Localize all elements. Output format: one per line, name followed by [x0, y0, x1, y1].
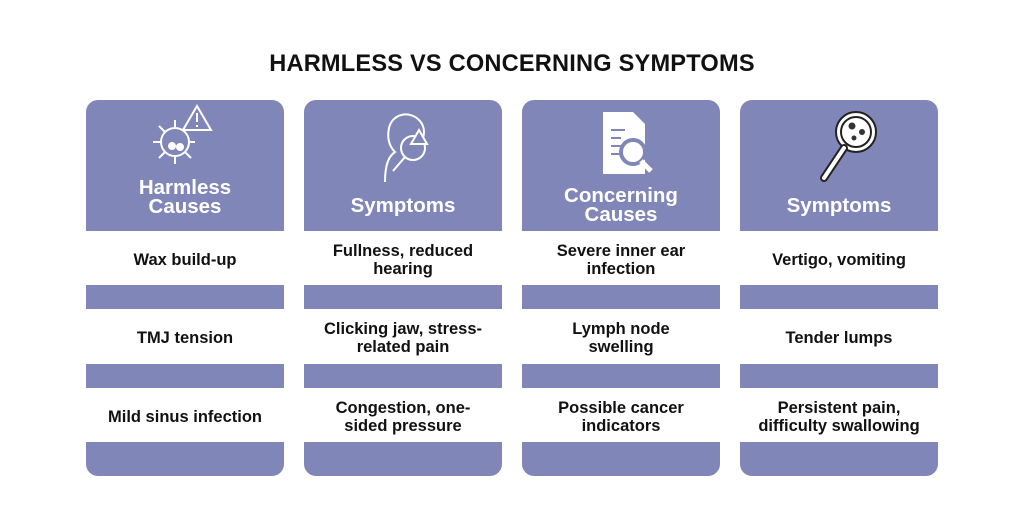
header: concerning causes [564, 112, 678, 226]
row: Congestion, one- [336, 398, 470, 416]
row: Wax build-up [134, 250, 236, 268]
header: symptoms [787, 111, 891, 217]
header: symptoms: Symptoms [787, 194, 891, 217]
panel: concerning causes [522, 100, 720, 476]
row: hearing [373, 260, 433, 278]
row: Mild sinus infection [108, 408, 262, 426]
row: Possible cancer [558, 398, 684, 416]
row [86, 231, 284, 285]
row [522, 231, 720, 285]
row: Tender lumps [786, 329, 892, 347]
row: sided pressure [344, 416, 462, 434]
row [740, 231, 938, 285]
row: swelling [588, 338, 654, 356]
row: Lymph node [572, 320, 670, 338]
row [304, 309, 502, 364]
header: symptoms: Symptoms [351, 194, 455, 217]
panel: symptoms (concerning) [740, 100, 938, 476]
row: Persistent pain, [778, 398, 900, 416]
header: harmless causes: Causes [149, 195, 221, 218]
row: related pain [357, 338, 449, 356]
icon: document with magnifier [603, 112, 653, 174]
row: TMJ tension [137, 329, 233, 347]
row [86, 309, 284, 364]
row: Vertigo, vomiting [772, 250, 906, 268]
panel: harmless causes [86, 100, 284, 476]
row: Fullness, reduced [333, 242, 473, 260]
row [740, 388, 938, 442]
row: indicators [582, 416, 660, 434]
header: concerning causes: Concerning [564, 184, 678, 207]
row: infection [587, 260, 655, 278]
icon: person with magnifier [384, 113, 429, 182]
row: Severe inner ear [557, 242, 685, 260]
row [522, 309, 720, 364]
header: symptoms [351, 113, 455, 217]
header: harmless causes [139, 104, 231, 218]
row [304, 388, 502, 442]
row [304, 231, 502, 285]
row [522, 388, 720, 442]
header: harmless causes: Harmless [139, 176, 231, 199]
row [740, 309, 938, 364]
panel: symptoms (harmless) [304, 100, 502, 476]
row: difficulty swallowing [758, 416, 920, 434]
icon: virus with warning [153, 104, 213, 164]
header: concerning causes: Causes [585, 203, 657, 226]
row [86, 388, 284, 442]
icon: magnifier with germs [820, 111, 877, 182]
title: HARMLESS VS CONCERNING SYMPTOMS [269, 51, 755, 77]
row: Clicking jaw, stress- [324, 320, 482, 338]
